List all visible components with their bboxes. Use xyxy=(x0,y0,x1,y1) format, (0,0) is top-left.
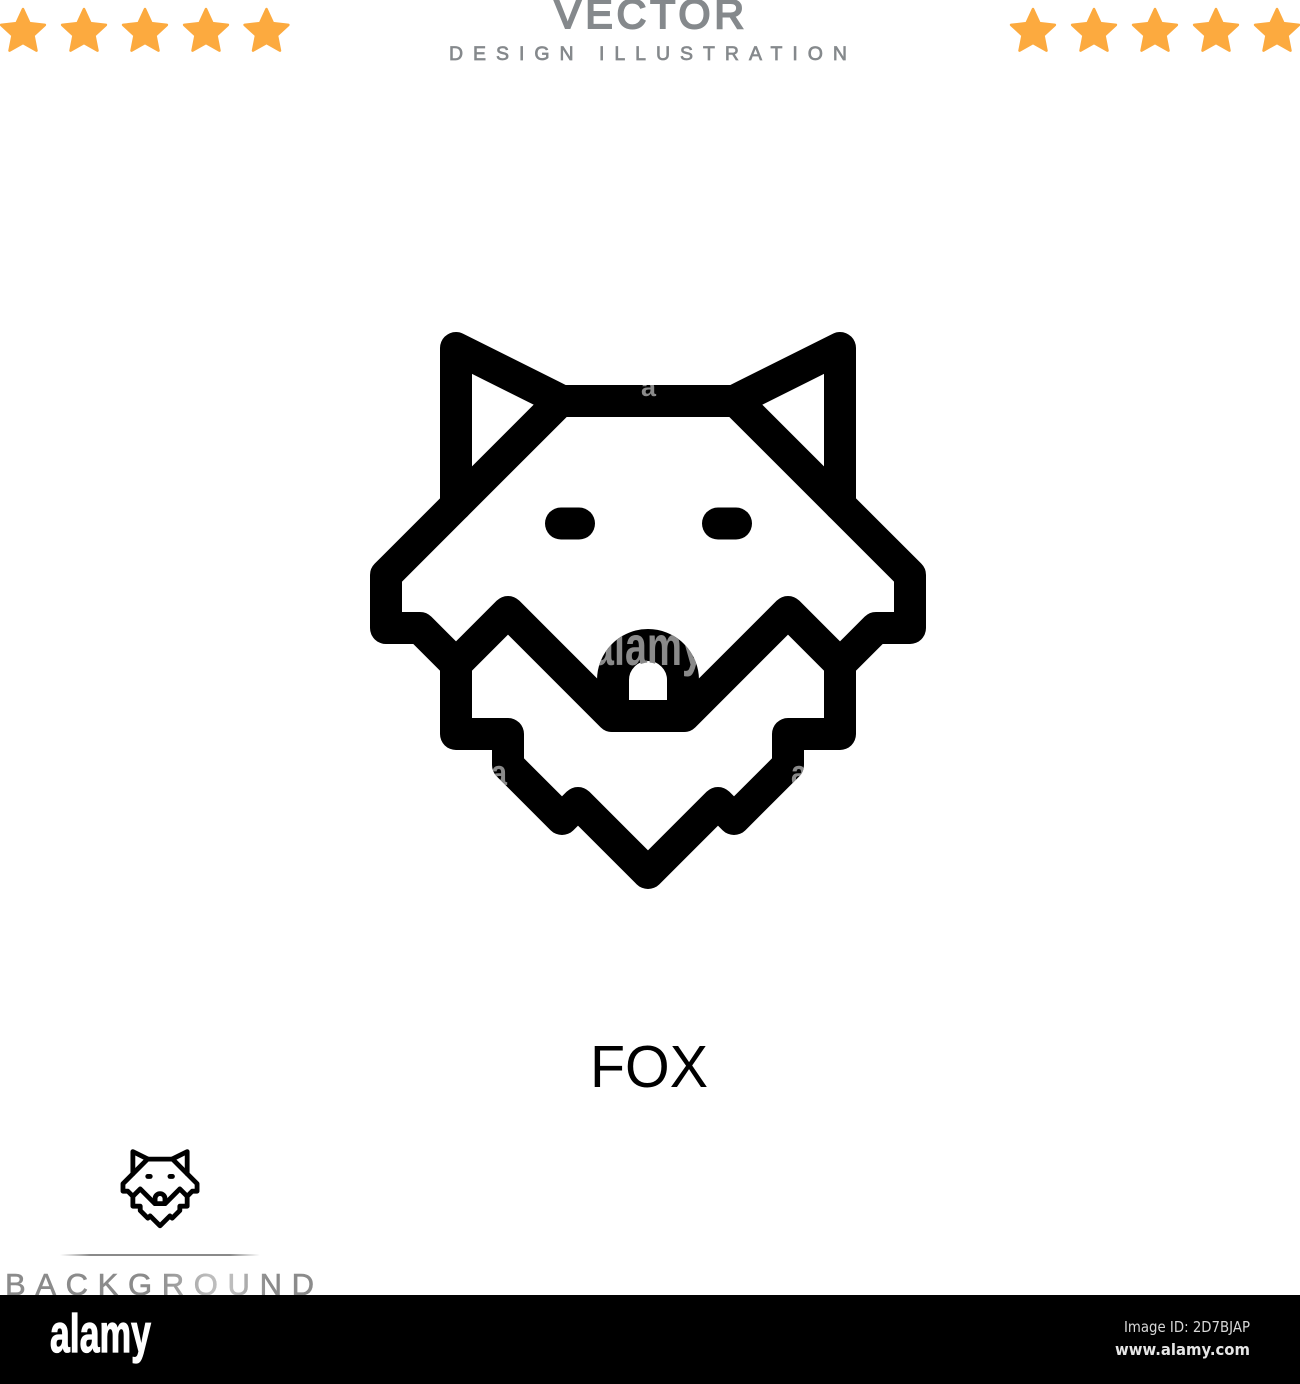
footer bar xyxy=(0,1295,1300,1384)
website: www.alamy.com xyxy=(1115,1340,1250,1359)
watermark: nose text: alamy xyxy=(592,614,704,677)
fox outline xyxy=(386,401,910,873)
left eye xyxy=(561,508,579,540)
fox nose xyxy=(613,645,683,716)
fox muzzle line xyxy=(456,612,840,716)
right ear xyxy=(736,348,840,505)
watermark: letters on outline: a xyxy=(791,752,808,793)
watermark: letters on outline xyxy=(491,372,808,793)
logo: alamy: alamy xyxy=(50,1304,151,1364)
watermark: letters on outline: a xyxy=(491,752,508,793)
label: BACKGROUND: BACKGROUND xyxy=(5,1267,314,1302)
left ear xyxy=(456,348,560,505)
subtitle: DESIGN ILLUSTRATION: DESIGN ILLUSTRATION xyxy=(449,43,847,65)
nose opening xyxy=(630,662,667,700)
icon: fox head large xyxy=(386,348,910,873)
stars: top left rating xyxy=(1,9,288,51)
divider line xyxy=(60,1254,260,1256)
image id: Image ID: 2D7BJAP xyxy=(1124,1318,1250,1336)
right eye xyxy=(718,508,736,540)
watermark: letters on outline: a xyxy=(641,372,657,402)
stars: top right rating xyxy=(1011,9,1299,51)
icon: fox head small xyxy=(123,1152,197,1226)
label: FOX: FOX xyxy=(590,1034,708,1100)
